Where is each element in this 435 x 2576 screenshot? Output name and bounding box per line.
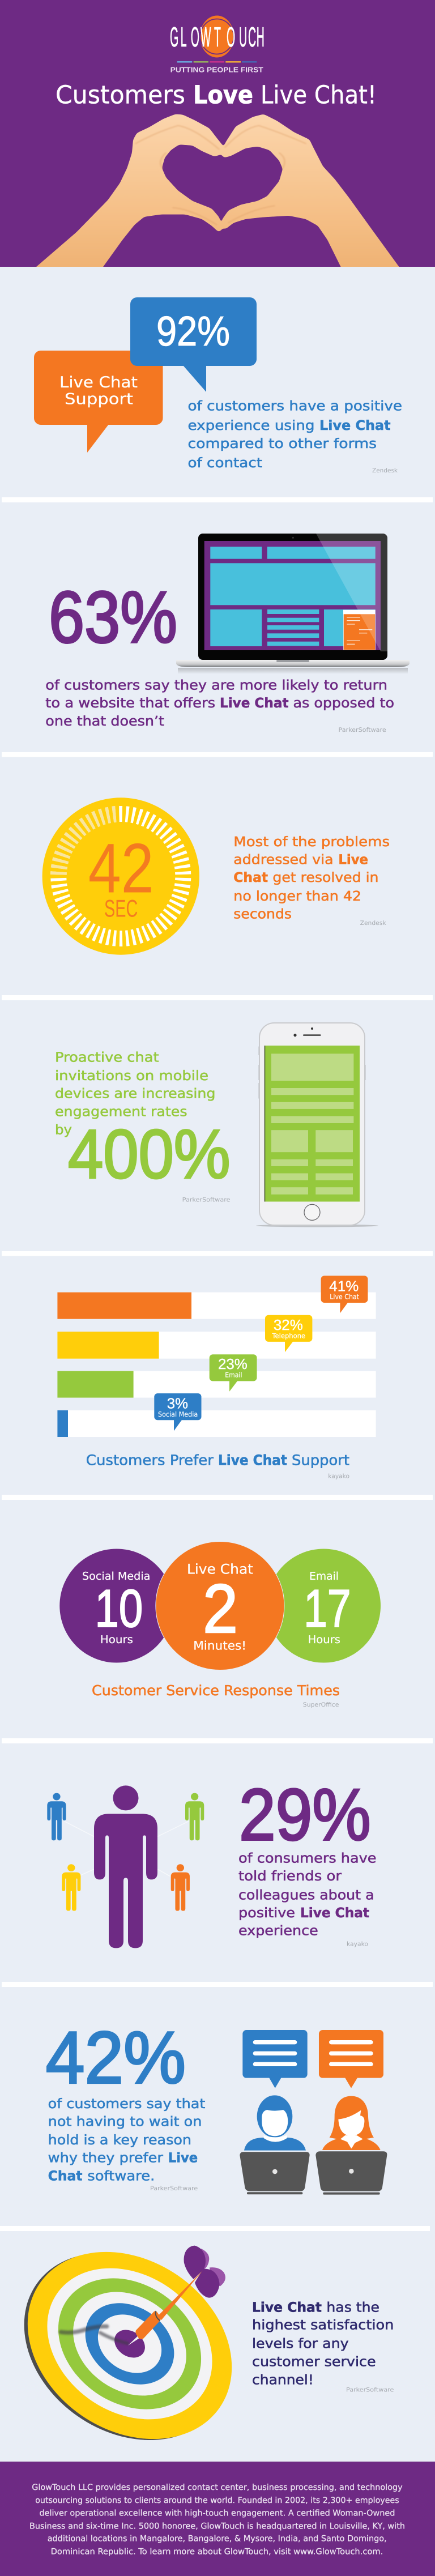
callout: 23 percent email: Email xyxy=(225,1371,242,1379)
text: 42 percent description: not having to wait on xyxy=(48,2114,202,2130)
text: 29 percent description: colleagues about a xyxy=(238,1887,374,1903)
stat: 63 percent: 63% xyxy=(49,577,177,658)
text: satisfaction description: customer service xyxy=(252,2353,376,2369)
source: ParkerSoftware: ParkerSoftware xyxy=(346,2387,394,2394)
icon: woman with speech bubble xyxy=(315,2030,387,2195)
callout: 3 percent social media xyxy=(154,1393,202,1431)
title xyxy=(56,80,377,110)
bar chart xyxy=(57,1293,376,1437)
circle: social media 10 hours: Social Media xyxy=(82,1570,150,1583)
orange chat bubble: Support xyxy=(65,391,133,408)
callout: 32 percent telephone: 32% xyxy=(274,1316,303,1333)
text: company description: Business and six-time Inc. 5000 honoree, GlowTouch is headquartered in Louisville, KY, with xyxy=(29,2522,405,2531)
stat: 29 percent: 29% xyxy=(239,1774,371,1856)
heading: customers prefer live chat support: Support xyxy=(292,1452,349,1468)
callout: 32 percent telephone xyxy=(265,1315,312,1352)
panel: 29 percent xyxy=(47,1774,377,1948)
panel: customers prefer live chat xyxy=(57,1276,376,1479)
text: 92 percent description: experience using xyxy=(188,417,315,433)
icon: heart hands xyxy=(28,114,404,274)
text: 42 seconds description: no longer than 42 xyxy=(233,888,361,904)
text: 42 seconds description: Most of the problems xyxy=(233,834,390,850)
text: satisfaction description: Live Chat xyxy=(252,2299,322,2315)
text: 63 percent description: as opposed to xyxy=(293,695,394,711)
text: 63 percent description: one that doesn’t xyxy=(45,713,164,729)
logo: GlowTouch xyxy=(170,16,265,74)
source: SuperOffice: SuperOffice xyxy=(303,1701,339,1708)
text: 29 percent description: of consumers have xyxy=(238,1850,376,1866)
text: 63 percent description xyxy=(45,677,394,729)
callout: 23 percent email: 23% xyxy=(218,1355,248,1372)
text: proactive chat description xyxy=(55,1050,215,1138)
icon: stopwatch dial: 42 xyxy=(88,830,154,908)
panel: 63 percent xyxy=(45,534,410,733)
icon: dartboard with dart xyxy=(0,2212,268,2480)
text: 92 percent description: of contact xyxy=(188,455,262,471)
text: satisfaction description xyxy=(252,2299,394,2387)
text: company description: additional locations in Mangalore, Bangalore, & Mysore, India, and Santo Domingo, xyxy=(48,2534,387,2543)
heading: customer service response times: Customer Service Response Times xyxy=(92,1682,340,1699)
text: 42 percent description: software. xyxy=(87,2168,155,2184)
text: satisfaction description: highest satisfaction xyxy=(252,2317,394,2333)
stat: 42 percent: 42% xyxy=(46,2016,186,2099)
circle: social media 10 hours: Hours xyxy=(100,1634,133,1646)
text: 92 percent description: Live Chat xyxy=(319,417,391,433)
source: Zendesk: Zendesk xyxy=(360,920,387,927)
text: company description xyxy=(29,2483,405,2556)
source: kayako: kayako xyxy=(347,1940,368,1947)
callout: 41 percent live chat: Live Chat xyxy=(330,1293,359,1301)
text: 42 percent description: Live xyxy=(168,2150,198,2166)
text: proactive chat description: Proactive chat xyxy=(55,1050,159,1065)
icon: blue person xyxy=(47,1793,66,1840)
callout: 3 percent social media: 3% xyxy=(167,1395,188,1412)
text: satisfaction description: levels for any xyxy=(252,2335,349,2351)
text: proactive chat description: devices are increasing xyxy=(55,1085,215,1101)
text: 29 percent description xyxy=(238,1850,376,1938)
logo: GlowTouch: PUTTING PEOPLE FIRST xyxy=(170,65,263,74)
text: 42 seconds description: Chat xyxy=(233,869,268,885)
text: proactive chat description: by xyxy=(55,1122,72,1138)
callout: 41 percent live chat: 41% xyxy=(329,1277,359,1294)
text: 42 seconds description: Live xyxy=(338,852,368,868)
circle: live chat 2 minutes xyxy=(156,1542,284,1670)
text: 42 seconds description: addressed via xyxy=(233,852,334,868)
source: kayako: kayako xyxy=(328,1473,349,1479)
icon: large purple person xyxy=(94,1785,157,1948)
icon: smartphone xyxy=(256,1023,378,1227)
panel: 42 percent xyxy=(46,2016,387,2195)
orange chat bubble: Live Chat xyxy=(59,374,138,391)
circle: social media 10 hours: 10 xyxy=(95,1579,143,1638)
icon: chatting people with laptops xyxy=(240,2030,387,2195)
panel: satisfaction xyxy=(0,2212,394,2480)
panel: response times xyxy=(59,1542,381,1708)
icon: stopwatch dial xyxy=(42,797,199,955)
callout: 41 percent live chat xyxy=(321,1276,368,1313)
source: ParkerSoftware: ParkerSoftware xyxy=(339,727,386,733)
blue chat bubble xyxy=(130,297,257,392)
icon: people network xyxy=(47,1785,204,1948)
source: ParkerSoftware: ParkerSoftware xyxy=(182,1196,230,1203)
circle: email 17 hours: 17 xyxy=(304,1579,351,1638)
circle: email 17 hours: Hours xyxy=(308,1634,340,1646)
text: 42 seconds description: get resolved in xyxy=(272,869,378,885)
title: Love xyxy=(193,80,253,110)
text: 29 percent description: experience xyxy=(238,1922,318,1938)
text: 92 percent description: compared to other forms xyxy=(188,436,377,451)
text: 42 percent description: why they prefer xyxy=(48,2150,163,2166)
circle: live chat 2 minutes: Minutes! xyxy=(193,1639,246,1652)
text: proactive chat description: engagement rates xyxy=(55,1103,187,1119)
panel: 92 percent xyxy=(34,297,402,474)
text: 29 percent description: told friends or xyxy=(238,1868,342,1884)
orange chat bubble xyxy=(34,351,163,453)
callout: 23 percent email xyxy=(210,1354,257,1392)
heading: customers prefer live chat support: Customers Prefer xyxy=(86,1452,214,1468)
text: 29 percent description: Live Chat xyxy=(300,1905,369,1921)
text: 63 percent description: of customers say they are more likely to return xyxy=(45,677,387,693)
circle: email 17 hours: Email xyxy=(309,1570,339,1583)
text: 42 percent description: hold is a key reason xyxy=(48,2132,191,2148)
icon: stopwatch dial: SEC xyxy=(104,895,138,922)
circle: social media 10 hours xyxy=(59,1549,173,1663)
text: 63 percent description: to a website that offers xyxy=(45,695,215,711)
text: company description: Dominican Republic. To learn more about GlowTouch, visit www.GlowTouch.com. xyxy=(51,2547,383,2556)
circle: live chat 2 minutes: Live Chat xyxy=(187,1562,253,1577)
text: 92 percent description xyxy=(188,398,402,471)
source: Zendesk: Zendesk xyxy=(372,467,398,474)
panel: footer xyxy=(0,2462,435,2576)
text: satisfaction description: channel! xyxy=(252,2372,314,2387)
text: company description: GlowTouch LLC provides personalized contact center, business processing, and technology xyxy=(32,2483,403,2492)
circle: live chat 2 minutes: 2 xyxy=(203,1570,238,1647)
text: 29 percent description: positive xyxy=(238,1905,295,1921)
title: Customers xyxy=(56,80,185,110)
callout: 32 percent telephone: Telephone xyxy=(271,1332,305,1340)
heading: customers prefer live chat support xyxy=(86,1452,349,1468)
text: 42 seconds description: seconds xyxy=(233,906,292,922)
heading: customers prefer live chat support: Live Chat xyxy=(218,1452,287,1468)
text: 42 percent description: of customers say that xyxy=(48,2096,205,2112)
title: Live Chat! xyxy=(261,80,377,110)
icon: yellow person xyxy=(62,1864,80,1911)
icon: green person xyxy=(185,1793,204,1840)
text: 63 percent description: Live Chat xyxy=(220,695,289,711)
callout: 3 percent social media: Social Media xyxy=(158,1410,198,1418)
icon: laptop xyxy=(176,534,410,674)
stat: 400 percent: 400% xyxy=(68,1116,230,1193)
text: proactive chat description: invitations on mobile xyxy=(55,1068,208,1084)
blue chat bubble: 92% xyxy=(156,308,230,355)
icon: man with speech bubble xyxy=(240,2030,310,2194)
text: company description: deliver operational excellence with high-touch engagement. A certified Woman-Owned xyxy=(40,2509,395,2518)
text: company description: outsourcing solutions to clients around the world. Founded in 2002, its 2,300+ employees xyxy=(35,2496,399,2505)
text: satisfaction description: has the xyxy=(326,2299,379,2315)
text: 42 percent description xyxy=(48,2096,205,2184)
source: ParkerSoftware: ParkerSoftware xyxy=(150,2185,198,2192)
circle: email 17 hours xyxy=(267,1549,381,1663)
icon: orange person xyxy=(171,1864,190,1911)
text: 42 percent description: Chat xyxy=(48,2168,82,2184)
logo: GlowTouch: GLOWTOUCH xyxy=(170,22,265,53)
header panel xyxy=(0,0,435,274)
panel: 42 seconds xyxy=(42,797,390,955)
text: 92 percent description: of customers have a positive xyxy=(188,398,402,413)
text: 42 seconds description xyxy=(233,834,390,922)
panel: 400 percent xyxy=(55,1023,378,1227)
